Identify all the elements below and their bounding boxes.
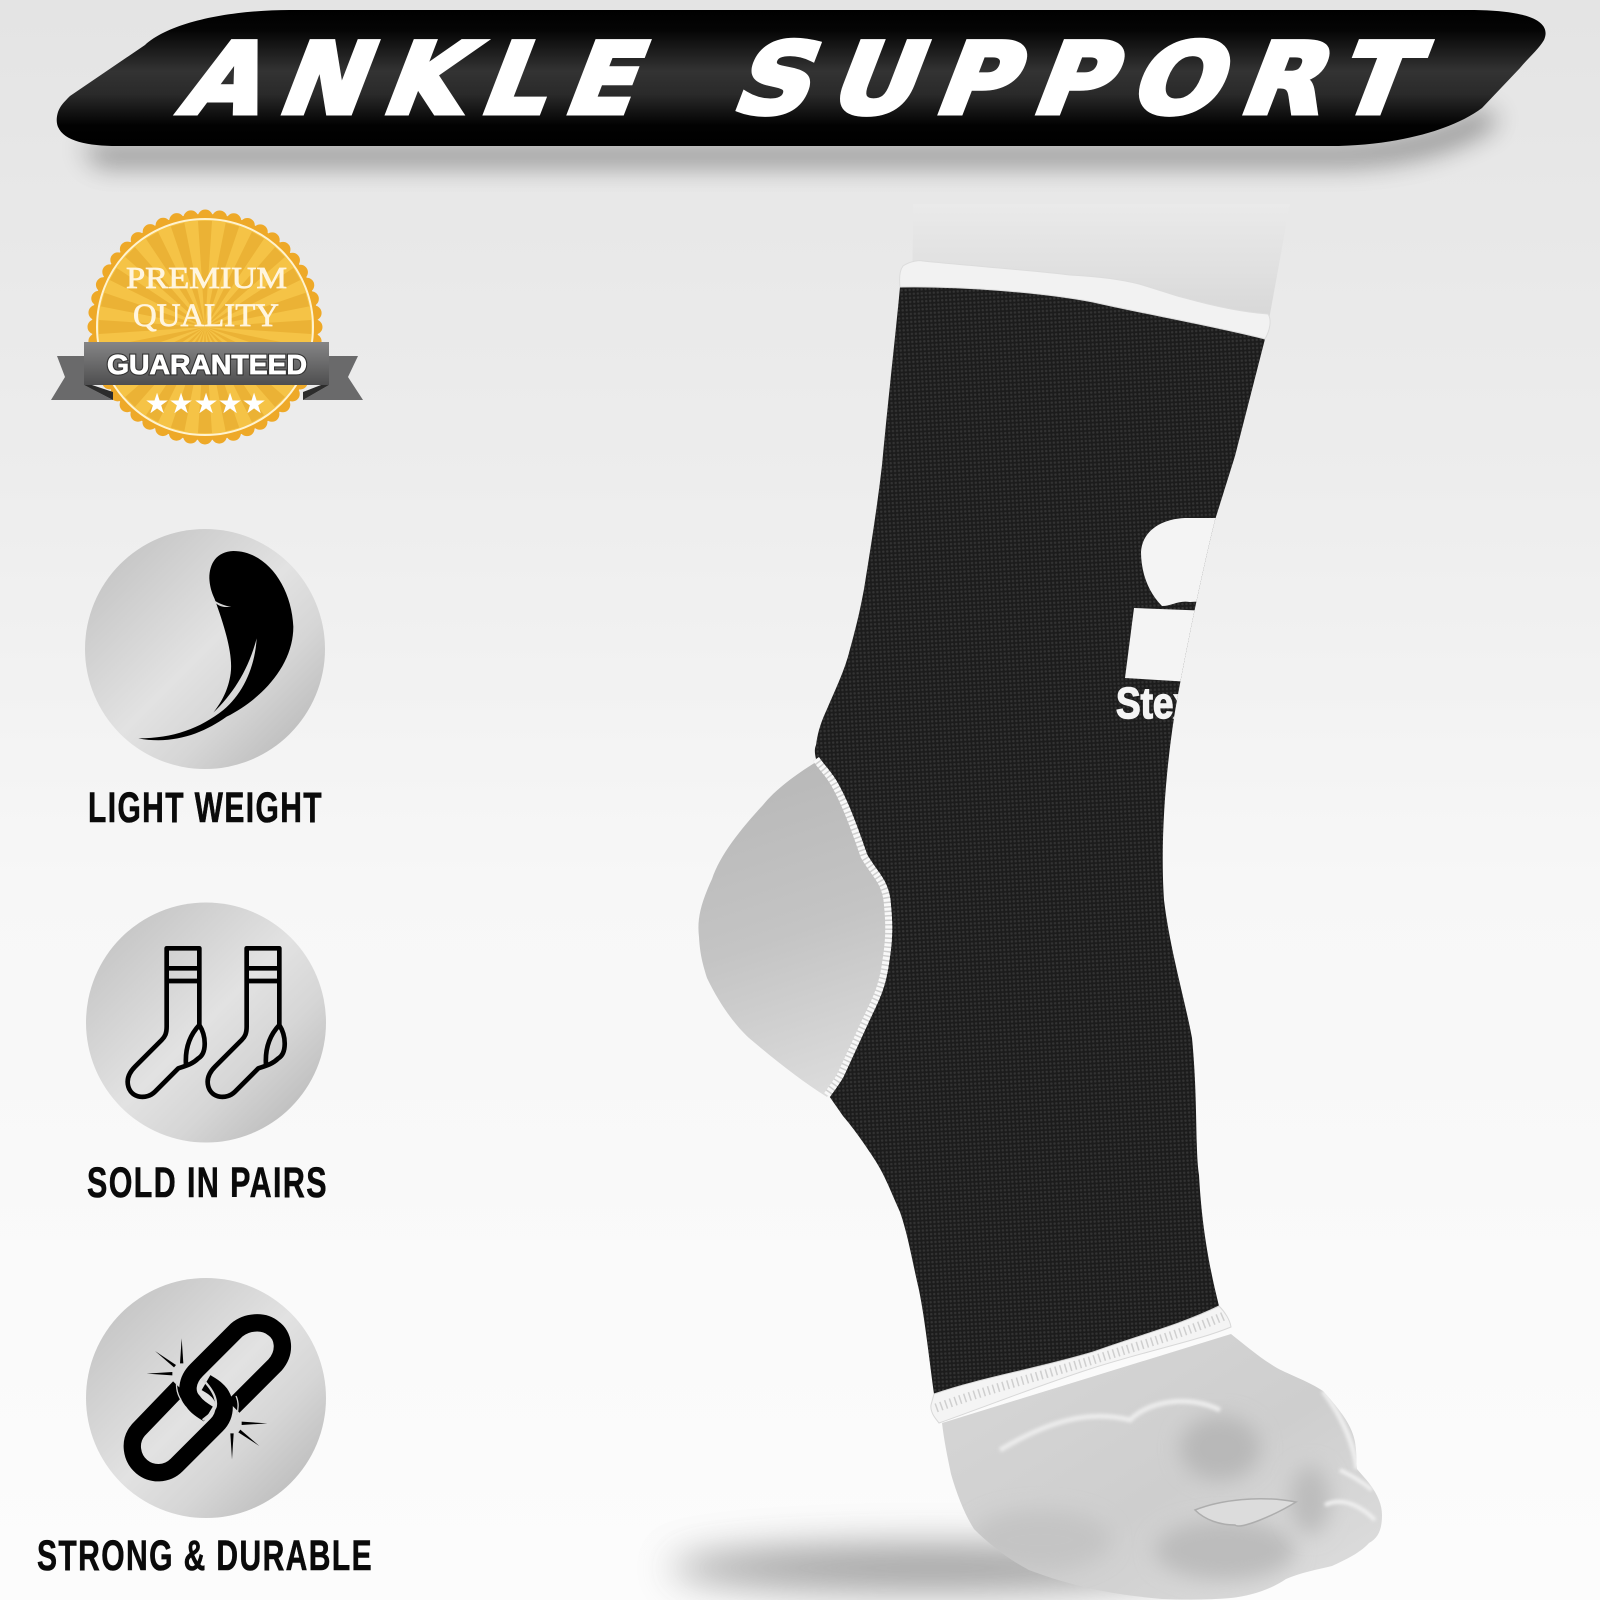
floor shadow (670, 1544, 1190, 1592)
label: sold in pairs: SOLD IN PAIRS (87, 1159, 328, 1207)
heel (698, 762, 900, 1097)
label: light weight: LIGHT WEIGHT (88, 784, 323, 832)
disc: light weight (85, 529, 325, 769)
premium quality badge: PREMIUM (126, 260, 287, 295)
sleeve body (800, 270, 1280, 1420)
premium quality badge (51, 214, 363, 440)
premium quality badge: ★★★★★ (144, 387, 267, 420)
title text (168, 22, 1460, 136)
feature: sold in pairs (86, 902, 328, 1207)
premium quality badge: GUARANTEED (107, 349, 307, 380)
title text: ANKLE (168, 22, 684, 136)
icon: chain link (132, 1323, 282, 1473)
premium quality badge: QUALITY (133, 298, 279, 334)
sleeve top hem (900, 261, 1270, 339)
disc: sold in pairs (86, 902, 326, 1142)
label: strong and durable: STRONG & DURABLE (37, 1532, 373, 1580)
feature: light weight (85, 529, 325, 832)
leg (912, 204, 1290, 325)
heel opening hem (816, 759, 889, 1095)
icon: pair of socks (128, 948, 285, 1097)
brand logo (1116, 518, 1216, 720)
product: ankle support on foot (670, 204, 1400, 1600)
feature: strong and durable (37, 1278, 373, 1580)
premium quality badge: GUARANTEED (107, 349, 307, 380)
foot (942, 1334, 1382, 1600)
brand logo: Stex (1116, 679, 1194, 728)
icon: feather (138, 551, 293, 740)
title text: SUPPORT (720, 22, 1460, 136)
title banner (57, 10, 1546, 165)
disc: strong and durable (86, 1278, 326, 1518)
sleeve bottom hem (931, 1306, 1231, 1423)
